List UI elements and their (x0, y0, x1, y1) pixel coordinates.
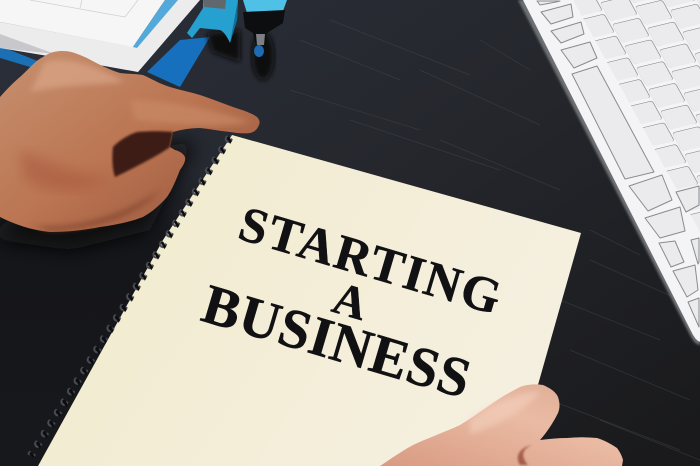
right hand holding the notebook corner (380, 384, 623, 466)
keyboard (518, 0, 700, 345)
blue marker with black tip (243, 0, 287, 80)
keyboard modifier keys and space bar (537, 1, 699, 327)
top white sheet (0, 0, 165, 47)
blue folder (147, 37, 210, 87)
blue highlighter cap (187, 0, 240, 62)
spiral binding (24, 133, 223, 452)
left hand pointing at the notebook (0, 51, 260, 232)
title line: STARTING: STARTING (233, 195, 508, 325)
notebook page (38, 135, 581, 466)
notebook title (195, 195, 508, 411)
papers and folder, top left (0, 0, 210, 87)
title line: BUSINESS: BUSINESS (195, 273, 478, 411)
keyboard key grid (573, 0, 700, 232)
title line: A: A (327, 272, 374, 330)
hand highlights and shading (20, 60, 250, 231)
hand shadow between index finger and thumb (112, 131, 173, 177)
shadow under the left hand (0, 140, 195, 250)
